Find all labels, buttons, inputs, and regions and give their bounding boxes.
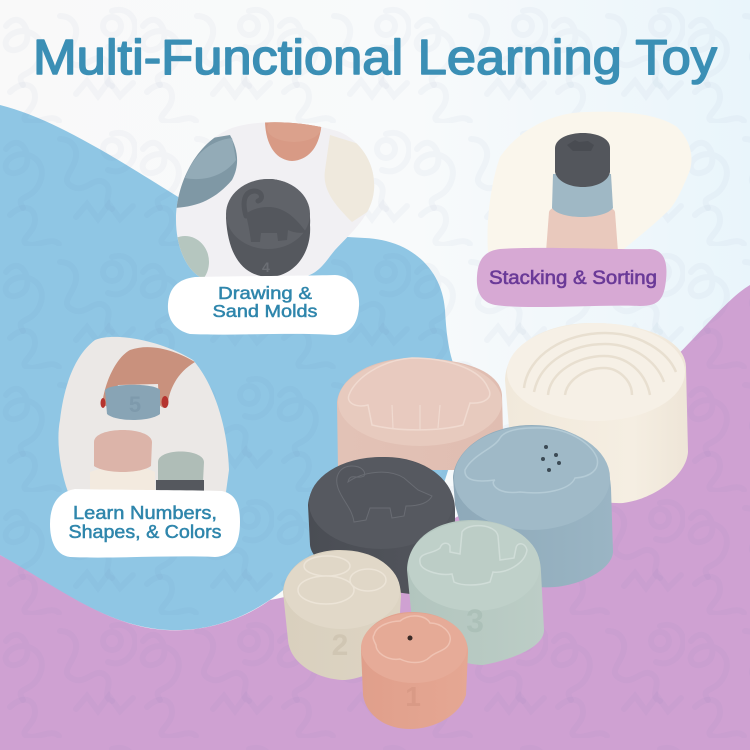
icon: blue cup number 5 xyxy=(105,385,160,420)
icon: cream cup xyxy=(325,135,378,222)
icon: cream cup xyxy=(90,466,155,495)
icon: coral cup xyxy=(265,122,322,161)
icon: dino relief xyxy=(244,191,306,242)
photo: cups from above: 4 xyxy=(262,259,270,275)
cup: dark dino xyxy=(308,457,455,600)
cup: beige cherries xyxy=(283,550,401,680)
cup: pink cupcake xyxy=(337,358,504,470)
cup: blue elephant xyxy=(453,425,613,587)
label: learn numbers: Shapes, & Colors xyxy=(68,522,222,542)
icon: pink cup xyxy=(94,430,152,472)
photo: stacked cups xyxy=(488,112,692,252)
background: blue wave region xyxy=(0,105,470,630)
icon: hand xyxy=(102,347,195,408)
label: stacking and sorting: Stacking & Sorting xyxy=(489,268,657,289)
icon: blue cup xyxy=(170,135,237,208)
label: stacking and sorting xyxy=(477,248,666,307)
label: drawing and sand molds: Drawing & xyxy=(218,283,312,303)
icon: sage cup xyxy=(158,452,204,482)
photo: cups from above xyxy=(176,122,374,277)
title: Multi-Functional Learning Toy xyxy=(33,31,718,85)
panel: drawing and sand molds xyxy=(161,114,380,335)
cup: sage cactus: 3 xyxy=(466,603,484,639)
icon: dark cup xyxy=(156,480,204,491)
background: purple wave region xyxy=(0,285,750,750)
label: learn numbers xyxy=(50,489,240,558)
label: learn numbers: Learn Numbers, xyxy=(73,503,217,523)
icon: blue cup number 5: 5 xyxy=(129,392,141,417)
cup: sage cactus xyxy=(407,520,544,665)
label: drawing and sand molds xyxy=(168,275,359,335)
label: drawing and sand molds: Sand Molds xyxy=(212,301,318,321)
icon: sage cup xyxy=(178,236,209,277)
cup: beige cherries: 2 xyxy=(332,629,348,662)
panel: learn numbers, shapes and colors xyxy=(50,335,240,558)
cup: coral flower xyxy=(361,612,468,729)
cup: coral flower: 1 xyxy=(405,681,421,712)
icon: dark dino cup xyxy=(226,179,310,277)
cup: cream rainbow xyxy=(505,323,688,503)
panel: stacking and sorting xyxy=(477,105,695,307)
photo: hand and cups xyxy=(55,335,235,495)
cup group: stacking cups xyxy=(283,323,688,729)
